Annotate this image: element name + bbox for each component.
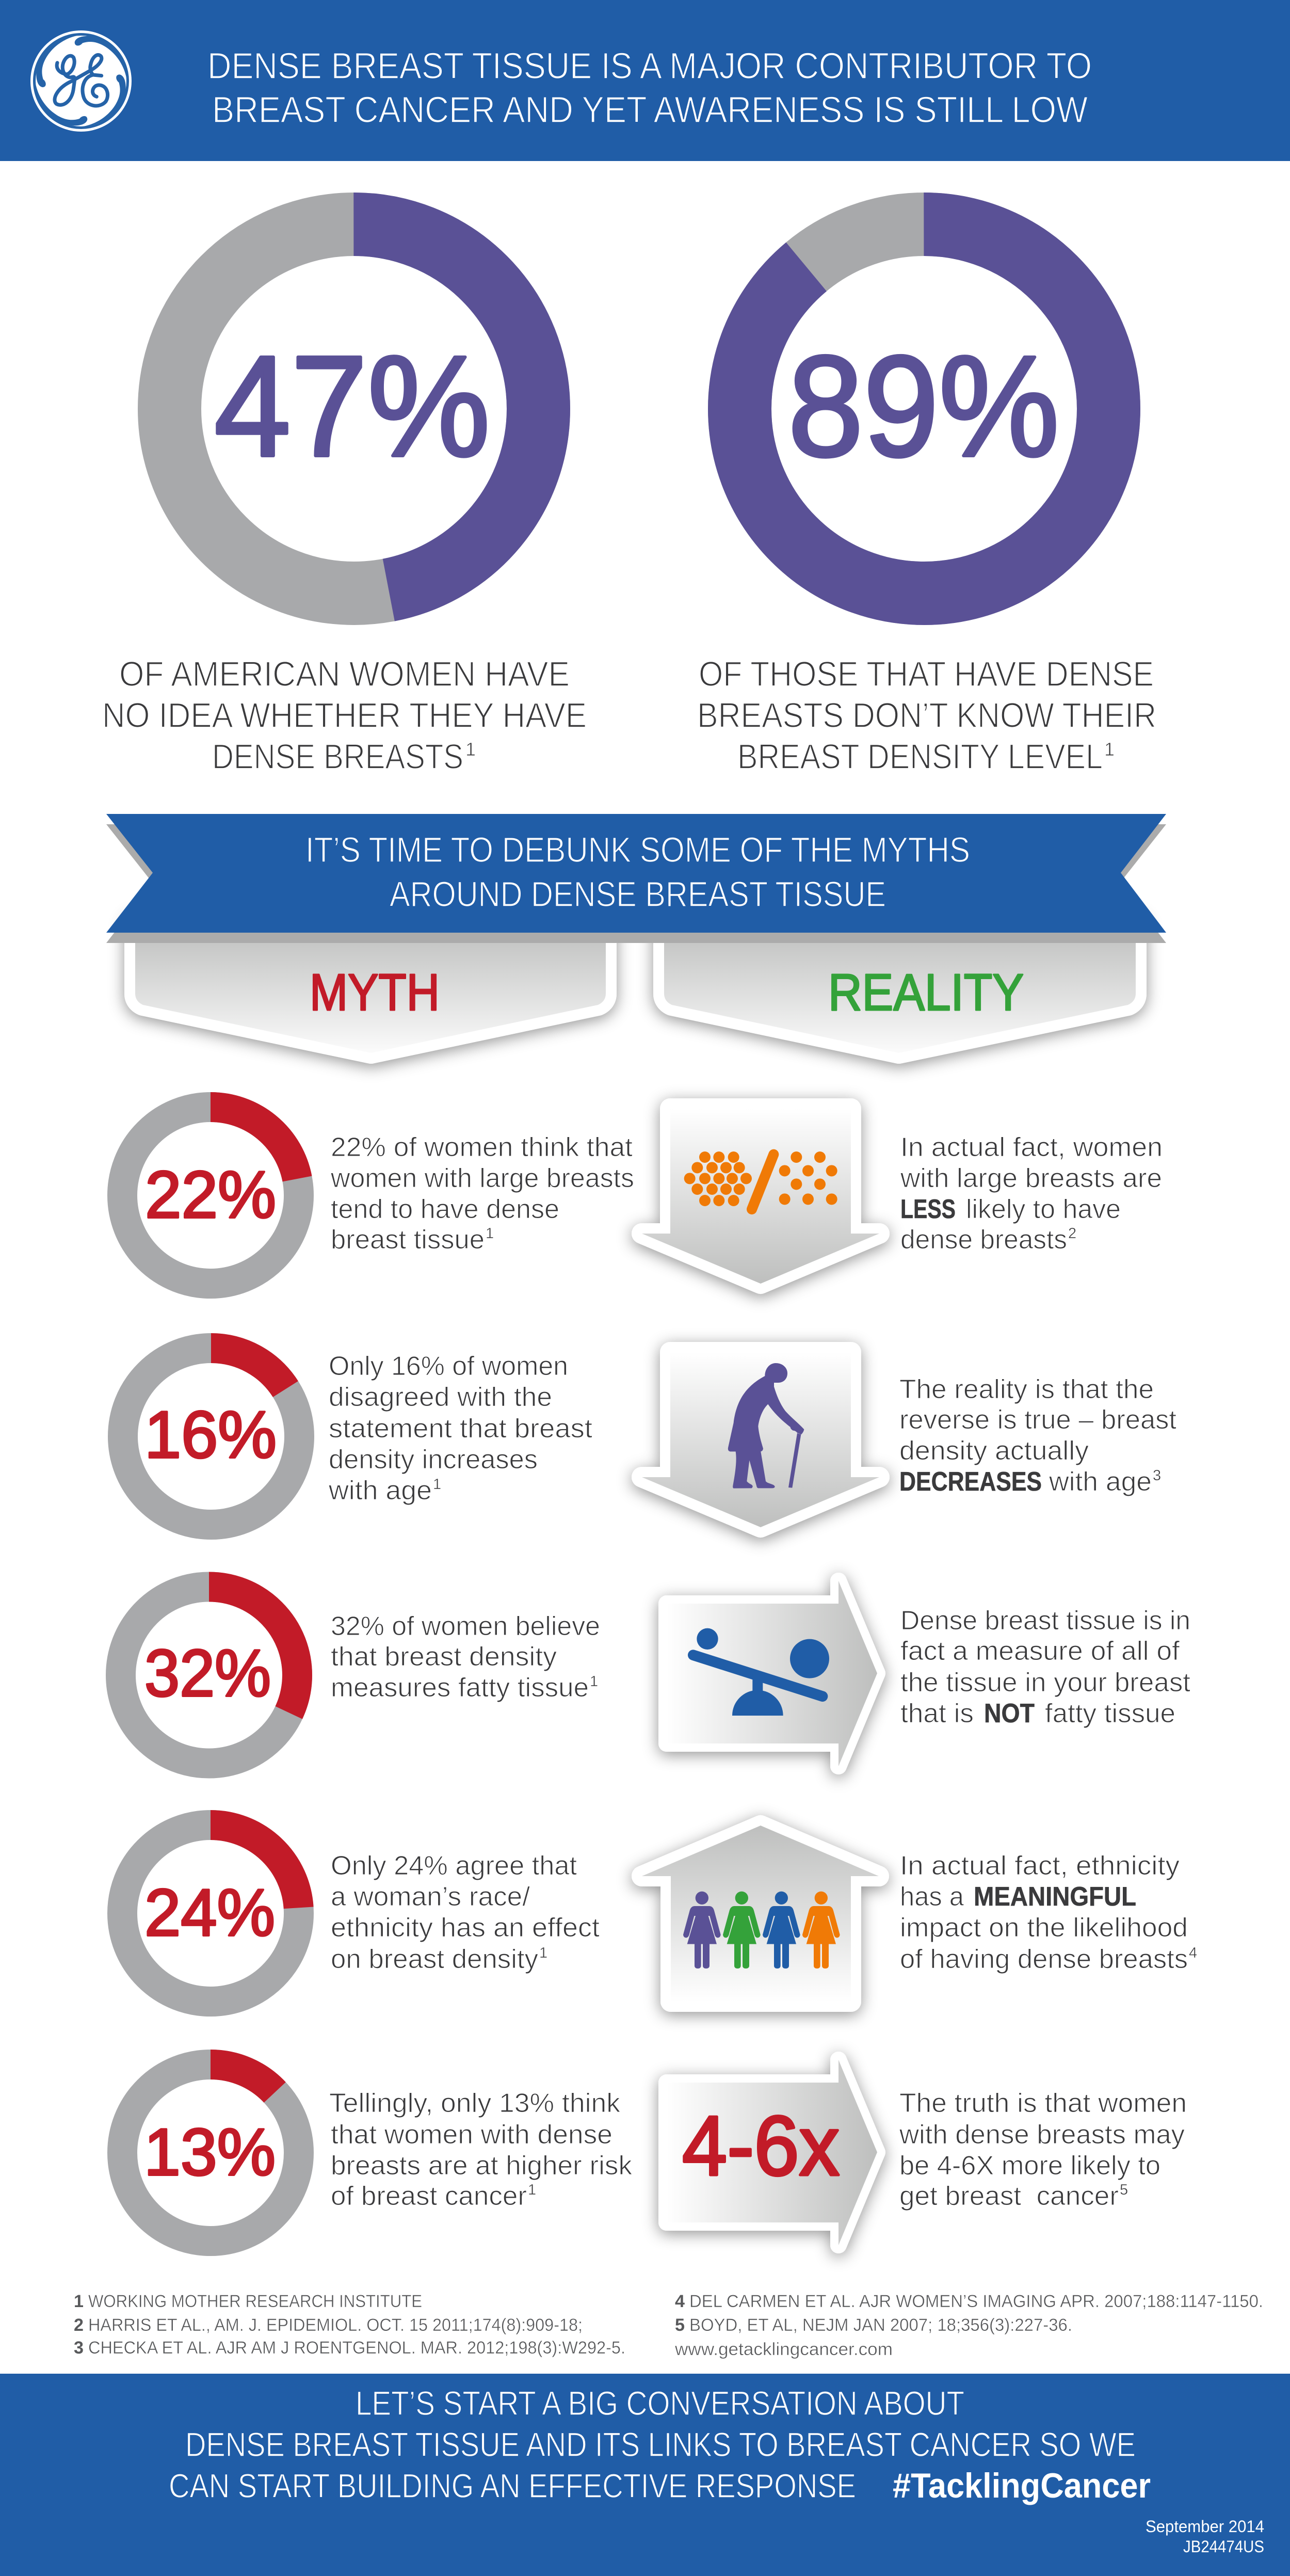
footer band <box>0 2374 1290 2576</box>
row 5: reality text: 5 <box>1120 2182 1128 2198</box>
date and job code: September 2014 <box>1146 2517 1264 2536</box>
caption: 47%: 1 <box>465 739 476 760</box>
row 1: myth text: 22% of women think that <box>331 1132 633 1162</box>
row 4: reality text: MEANINGFUL <box>974 1882 1136 1912</box>
row 2: arrow with elderly figure icon <box>642 1352 879 1527</box>
row 3: myth text: measures fatty tissue <box>331 1673 589 1703</box>
call to action: #TacklingCancer <box>893 2466 1151 2505</box>
heading: reality: REALITY <box>828 964 1024 1021</box>
banner text <box>305 830 970 914</box>
caption: 47% <box>102 654 587 776</box>
icon: dense vs sparse dots <box>684 1151 837 1209</box>
caption: 89% <box>697 654 1156 776</box>
icon: elderly person with cane <box>728 1363 804 1489</box>
row 3: myth text: 1 <box>590 1673 598 1690</box>
row 4: reality text: has a <box>900 1882 964 1912</box>
footnotes: left column <box>74 2292 625 2358</box>
row 1: myth text: women with large breasts <box>330 1163 634 1193</box>
footnotes: right column: 4 <box>675 2292 685 2311</box>
row 5: reality text: with dense breasts may <box>899 2120 1185 2150</box>
row 3: myth text <box>331 1611 600 1703</box>
row 4: myth donut 24% <box>122 1825 299 2002</box>
row 2: reality text: DECREASES <box>899 1467 1042 1497</box>
row 3: reality text: fact a measure of all of <box>900 1636 1180 1666</box>
date and job code <box>1146 2517 1264 2556</box>
footnotes: left column: 1 <box>74 2292 84 2311</box>
row 4: reality text: of having dense breasts <box>900 1944 1188 1974</box>
row 2: reality text: The reality is that the <box>899 1374 1154 1404</box>
row 2: reality text: with age <box>1049 1467 1152 1497</box>
row 3: myth text: 32% of women believe <box>331 1611 600 1641</box>
row 1: reality text: LESS <box>900 1194 956 1224</box>
row 4: myth text: ethnicity has an effect <box>331 1913 600 1943</box>
date and job code: JB24474US <box>1183 2537 1264 2556</box>
footnotes: left column: WORKING MOTHER RESEARCH INSTITUTE <box>88 2292 422 2311</box>
heading: myth: MYTH <box>310 964 440 1021</box>
row 4: reality text: In actual fact, ethnicity <box>900 1851 1180 1881</box>
panel: myth heading chevron <box>135 924 606 1053</box>
panel: reality heading chevron <box>664 924 1136 1053</box>
row 3: myth donut 32% <box>121 1587 297 1763</box>
footnotes: left column: CHECKA ET AL. AJR AM J ROENTGENOL. MAR. 2012;198(3):W292-5. <box>88 2338 625 2358</box>
row 2: myth text <box>328 1351 593 1506</box>
caption: 89%: 1 <box>1104 739 1115 760</box>
row 5: reality text: The truth is that women <box>899 2088 1187 2118</box>
row 2: myth text: Only 16% of women <box>329 1351 568 1381</box>
banner ribbon <box>106 814 1166 943</box>
row 2: myth text: 1 <box>433 1476 441 1493</box>
caption: 47%: NO IDEA WHETHER THEY HAVE <box>102 696 587 735</box>
footnotes: right column: 5 <box>675 2315 685 2335</box>
row 1: reality text: likely to have <box>966 1194 1121 1224</box>
donut chart: 47% <box>169 224 539 594</box>
row 2: reality text: density actually <box>899 1436 1089 1466</box>
row 1: arrow with density icon <box>642 1109 879 1284</box>
row 3: reality text <box>900 1606 1191 1729</box>
row 3: myth donut 32%: 32% <box>144 1636 271 1710</box>
call to action: CAN START BUILDING AN EFFECTIVE RESPONSE <box>169 2467 856 2505</box>
row 2: myth text: statement that breast <box>329 1414 593 1444</box>
banner text: IT’S TIME TO DEBUNK SOME OF THE MYTHS <box>305 830 970 870</box>
row 5: myth text: Tellingly, only 13% think <box>329 2088 621 2118</box>
banner text: AROUND DENSE BREAST TISSUE <box>390 874 886 914</box>
row 3: myth text: that breast density <box>331 1642 557 1672</box>
row 4: arrow with women icon <box>642 1826 879 2002</box>
row 4: reality text: 4 <box>1189 1945 1197 1961</box>
row 5: myth text <box>329 2088 633 2211</box>
row 4: myth text: Only 24% agree that <box>331 1851 577 1881</box>
row 1: reality text: with large breasts are <box>900 1163 1162 1193</box>
header title: DENSE BREAST TISSUE IS A MAJOR CONTRIBUTOR TO <box>207 46 1092 87</box>
row 4: myth text: on breast density <box>331 1944 538 1974</box>
call to action <box>169 2384 1151 2505</box>
caption: 89%: BREAST DENSITY LEVEL <box>737 737 1103 776</box>
row 1: reality text: dense breasts <box>900 1225 1067 1255</box>
row 3: reality text: fatty tissue <box>1045 1699 1175 1729</box>
header band <box>0 0 1290 161</box>
row 5: reality text <box>899 2088 1187 2211</box>
row 4: myth donut 24%: 24% <box>144 1876 275 1950</box>
row 5: myth text: of breast cancer <box>331 2181 527 2211</box>
icon: seesaw <box>693 1628 829 1716</box>
row 4: reality text <box>900 1851 1197 1974</box>
footnotes: right column: DEL CARMEN ET AL. AJR WOMEN’S IMAGING APR. 2007;188:1147-1150. <box>689 2292 1263 2311</box>
row 2: reality text: 3 <box>1153 1467 1161 1484</box>
caption: 89%: BREASTS DON’T KNOW THEIR <box>697 696 1156 735</box>
donut chart: 89%: 89% <box>788 326 1059 486</box>
donut chart: 89% <box>740 224 1108 594</box>
footnotes: left column: 2 <box>74 2315 84 2335</box>
icon: GE logo <box>30 30 132 132</box>
stat: 4-6x: 4-6x <box>682 2099 840 2193</box>
donut chart: 47%: 47% <box>214 326 490 486</box>
row 1: myth text <box>330 1132 634 1255</box>
row 3: arrow with seesaw icon <box>667 1581 877 1766</box>
row 4: myth text: a woman’s race/ <box>331 1882 530 1912</box>
footnotes: right column: BOYD, ET AL, NEJM JAN 2007; 18;356(3):227-36. <box>689 2315 1072 2335</box>
row 3: reality text: Dense breast tissue is in <box>900 1606 1190 1636</box>
row 3: reality text: NOT <box>984 1699 1035 1729</box>
row 2: reality text: reverse is true – breast <box>899 1405 1177 1435</box>
row 2: myth text: disagreed with the <box>329 1382 552 1412</box>
header title: BREAST CANCER AND YET AWARENESS IS STILL LOW <box>212 90 1088 131</box>
row 5: myth donut 13%: 13% <box>144 2115 276 2189</box>
row 5: reality text: get breast cancer <box>899 2181 1119 2211</box>
row 2: reality text <box>899 1374 1177 1497</box>
row 1: reality text <box>900 1132 1163 1255</box>
call to action: LET’S START A BIG CONVERSATION ABOUT <box>356 2384 964 2422</box>
row 5: myth donut 13% <box>122 2065 299 2241</box>
row 3: reality text: that is <box>900 1699 974 1729</box>
row 4: reality text: impact on the likelihood <box>900 1913 1188 1943</box>
row 1: myth text: tend to have dense <box>331 1194 559 1224</box>
row 5: arrow with 4-6x figure <box>667 2060 877 2245</box>
row 1: reality text: In actual fact, women <box>900 1132 1163 1162</box>
row 1: myth donut 22%: 22% <box>145 1158 276 1232</box>
row 5: myth text: breasts are at higher risk <box>331 2151 633 2181</box>
call to action: DENSE BREAST TISSUE AND ITS LINKS TO BREAST CANCER SO WE <box>185 2425 1136 2463</box>
footnotes: right column: www.getacklingcancer.com <box>674 2340 893 2359</box>
row 4: myth text: 1 <box>539 1945 547 1961</box>
row 2: myth donut 16%: 16% <box>144 1398 277 1472</box>
row 5: reality text: be 4-6X more likely to <box>899 2151 1160 2181</box>
caption: 89%: OF THOSE THAT HAVE DENSE <box>699 654 1154 694</box>
row 1: myth text: breast tissue <box>331 1225 485 1255</box>
caption: 47%: DENSE BREASTS <box>212 737 463 776</box>
row 2: myth text: density increases <box>329 1445 538 1475</box>
icon: four women <box>683 1892 840 1969</box>
footnotes: left column: HARRIS ET AL., AM. J. EPIDEMIOL. OCT. 15 2011;174(8):909-18; <box>88 2315 583 2335</box>
footnotes: left column: 3 <box>74 2338 84 2358</box>
row 3: reality text: the tissue in your breast <box>900 1668 1191 1698</box>
footnotes: right column <box>674 2292 1263 2359</box>
row 1: reality text: 2 <box>1068 1225 1076 1242</box>
row 2: myth text: with age <box>328 1476 432 1506</box>
row 1: myth donut 22% <box>122 1107 299 1284</box>
row 4: myth text <box>331 1851 600 1974</box>
row 1: myth text: 1 <box>486 1225 494 1242</box>
caption: 47%: OF AMERICAN WOMEN HAVE <box>119 654 570 694</box>
row 5: myth text: that women with dense <box>331 2120 612 2150</box>
row 5: myth text: 1 <box>528 2182 536 2198</box>
row 2: myth donut 16% <box>123 1348 299 1525</box>
header title <box>207 46 1092 131</box>
